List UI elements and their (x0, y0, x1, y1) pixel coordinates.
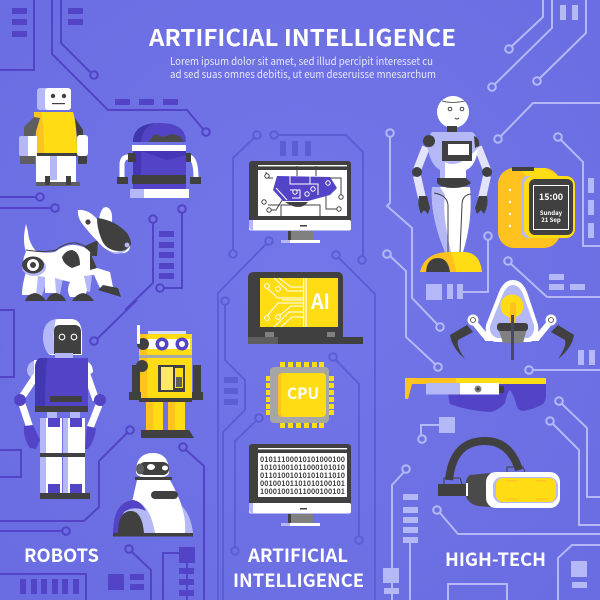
left circuit traces (0, 0, 210, 600)
light bulb robot (450, 280, 574, 360)
subtitle text (170, 54, 436, 82)
smart watch (498, 167, 575, 248)
subtitle text: ad sed suas omnes debitis, ut eum deseruisse mnesarchum (170, 67, 436, 82)
smart glasses (405, 378, 546, 412)
monitor: circuit chip (249, 161, 351, 243)
humanoid robot (412, 96, 492, 272)
label: artificial intelligence (233, 542, 364, 593)
laptop: AI (248, 272, 363, 344)
monitor: binary code: 01011100010101000100 (260, 454, 345, 465)
CPU chip: CPU (287, 382, 319, 404)
monitor: binary code: 00100101101010100101 (260, 478, 345, 489)
subtitle text: Lorem ipsum dolor sit amet, sed illud percipit interesset cu (170, 54, 433, 69)
label: robots: ROBOTS (24, 542, 99, 568)
monitor: binary code: 10001001011000100101 (260, 486, 345, 497)
robot: tall purple chest (14, 319, 106, 499)
monitor: binary code (249, 444, 351, 526)
monitor: binary code: 10101001011000101010 (260, 462, 345, 473)
smart watch: 21 Sep (541, 215, 561, 224)
right circuit traces (383, 0, 600, 600)
VR headset (438, 441, 560, 508)
robot: yellow torso (19, 88, 88, 186)
smart watch: Sunday (540, 208, 563, 217)
robot: purple dome (117, 123, 201, 198)
title: ARTIFICIAL INTELLIGENCE (148, 19, 456, 53)
label: artificial intelligence: INTELLIGENCE (233, 567, 364, 593)
CPU chip (266, 362, 334, 428)
laptop: AI: AI (310, 286, 330, 316)
robot: white dome on base (113, 453, 193, 536)
monitor: binary code: 01101001010101011010 (260, 470, 345, 481)
center circuit traces (218, 131, 375, 600)
label: artificial intelligence: ARTIFICIAL (247, 542, 348, 568)
robot: dog (22, 207, 131, 301)
robot: yellow boxy (129, 325, 203, 438)
label: high-tech: HIGH-TECH (445, 546, 546, 572)
smart watch: 15:00 (539, 190, 563, 203)
